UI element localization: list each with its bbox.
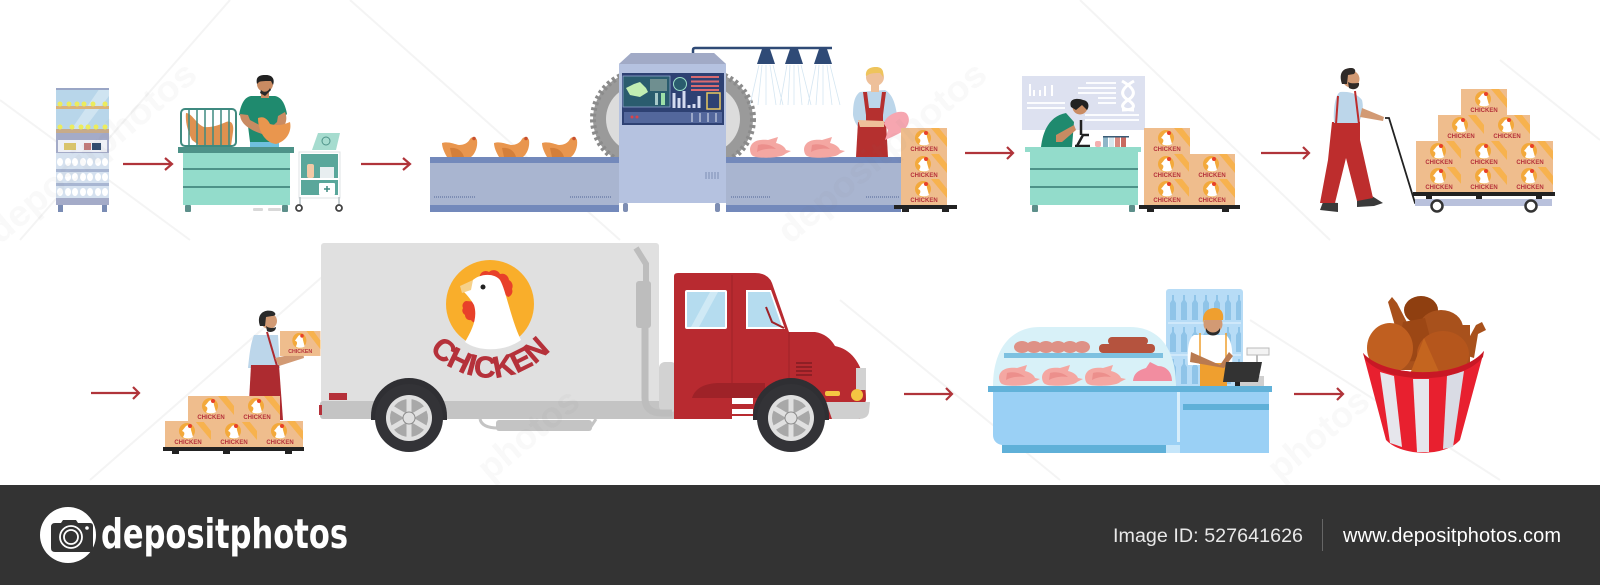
microscope [1075, 120, 1090, 146]
panel: step 7 butcher shop [988, 289, 1272, 453]
website url: www.depositphotos.com [1342, 525, 1561, 547]
arrow 7 [1294, 388, 1343, 400]
chicken boxes stack B: CHICKEN [1153, 173, 1181, 179]
live hens on belt [442, 137, 577, 157]
hen held [258, 117, 290, 144]
loader figure [248, 311, 304, 420]
central machine [619, 53, 726, 212]
chicken boxes stack D: CHICKEN [243, 415, 271, 421]
chicken boxes stack B: CHICKEN [1198, 198, 1226, 204]
cargo box [321, 243, 659, 403]
chicken boxes stack A: CHICKEN [910, 173, 938, 179]
depositphotos logo [40, 507, 348, 563]
lab technician [1041, 99, 1088, 147]
chicken boxes stack C: CHICKEN [1470, 160, 1498, 166]
chicken boxes stack B [1139, 128, 1240, 212]
chicken boxes stack C: CHICKEN [1425, 185, 1453, 191]
chicken logo [433, 260, 550, 378]
chicken boxes stack C: CHICKEN [1516, 185, 1544, 191]
pallet truck [1385, 118, 1555, 212]
chicken boxes stack C: CHICKEN [1447, 134, 1475, 140]
arrow 1 [123, 158, 172, 170]
back fridge [1166, 289, 1243, 386]
arrow 3 [965, 147, 1013, 159]
panel: step 4 laboratory check [1022, 76, 1240, 212]
chicken boxes stack A: CHICKEN [910, 147, 938, 153]
arrow 4 [1261, 147, 1309, 159]
shopkeeper [1188, 308, 1233, 386]
panel: step 2 veterinarian at table [178, 75, 342, 212]
panel: step 3 processing line [430, 48, 957, 212]
vet figure [239, 75, 287, 211]
chicken boxes stack D: CHICKEN [174, 440, 202, 446]
chicken boxes stack B: CHICKEN [1198, 173, 1226, 179]
plucked chickens on belt [750, 137, 845, 158]
chicken boxes stack D: CHICKEN [220, 440, 248, 446]
cage [181, 109, 236, 146]
chickens on display [999, 365, 1126, 386]
cash register monitor [1223, 348, 1269, 387]
control panel [622, 73, 724, 125]
watermark text: photos [469, 380, 587, 488]
table [178, 147, 294, 212]
chicken boxes stack C: CHICKEN [1425, 160, 1453, 166]
chicken boxes stack D: CHICKEN [266, 440, 294, 446]
panel: delivery truck [319, 243, 870, 452]
arrow 5 [91, 387, 139, 399]
footer band [0, 485, 1600, 585]
test tubes [1095, 136, 1129, 147]
info board [1022, 76, 1145, 130]
chicken boxes stack D [163, 396, 304, 454]
chicken boxes stack B: CHICKEN [1153, 198, 1181, 204]
chicken boxes stack C: CHICKEN [1470, 185, 1498, 191]
arrow 2 [361, 158, 410, 170]
panel: step 6 loading boxes [163, 311, 320, 454]
chicken boxes stack A: CHICKEN [910, 198, 938, 204]
chicken boxes stack C: CHICKEN [1493, 134, 1521, 140]
chassis and rear light [319, 393, 676, 431]
smoked salami [1099, 337, 1155, 353]
counter [988, 386, 1272, 453]
sausages [1014, 341, 1090, 353]
carried box: CHICKEN [288, 349, 312, 355]
minced meat [1133, 362, 1172, 381]
panel: step 1 incubator cabinet [56, 88, 109, 212]
chicken boxes stack A [894, 128, 957, 212]
lab table [1025, 147, 1141, 212]
walking worker [1320, 68, 1384, 212]
front wheel [753, 378, 829, 452]
chicken boxes stack B: CHICKEN [1153, 147, 1181, 153]
striped bucket [1363, 351, 1484, 453]
watermark text: depositphotos [769, 53, 994, 251]
chicken boxes stack C: CHICKEN [1470, 108, 1498, 114]
medical cart [296, 133, 342, 211]
raw chicken held [884, 112, 909, 140]
panel: step 5 warehouse worker with pallet truck [1320, 68, 1555, 212]
logo lettering: CHICKEN [433, 336, 550, 378]
watermark text: photos [1259, 380, 1377, 488]
saw gears [593, 72, 753, 166]
cab [674, 273, 870, 419]
arrow 6 [904, 388, 952, 400]
fried chicken pieces [1367, 296, 1486, 377]
rear wheel [371, 378, 447, 452]
chicken boxes stack D: CHICKEN [197, 415, 225, 421]
logo wordmark: depositphotos [101, 510, 348, 558]
carried box [280, 331, 320, 356]
conveyor belts [430, 157, 901, 212]
chicken boxes stack C: CHICKEN [1516, 160, 1544, 166]
overhead sprinklers [693, 48, 840, 105]
image id: Image ID: 527641626 [1113, 525, 1303, 547]
chicken boxes stack C [1416, 89, 1553, 192]
glass display case [993, 327, 1176, 386]
panel: fried chicken bucket [1363, 296, 1486, 453]
exhaust stack [636, 248, 677, 413]
watermark text [0, 53, 1377, 488]
butcher worker [853, 67, 897, 157]
